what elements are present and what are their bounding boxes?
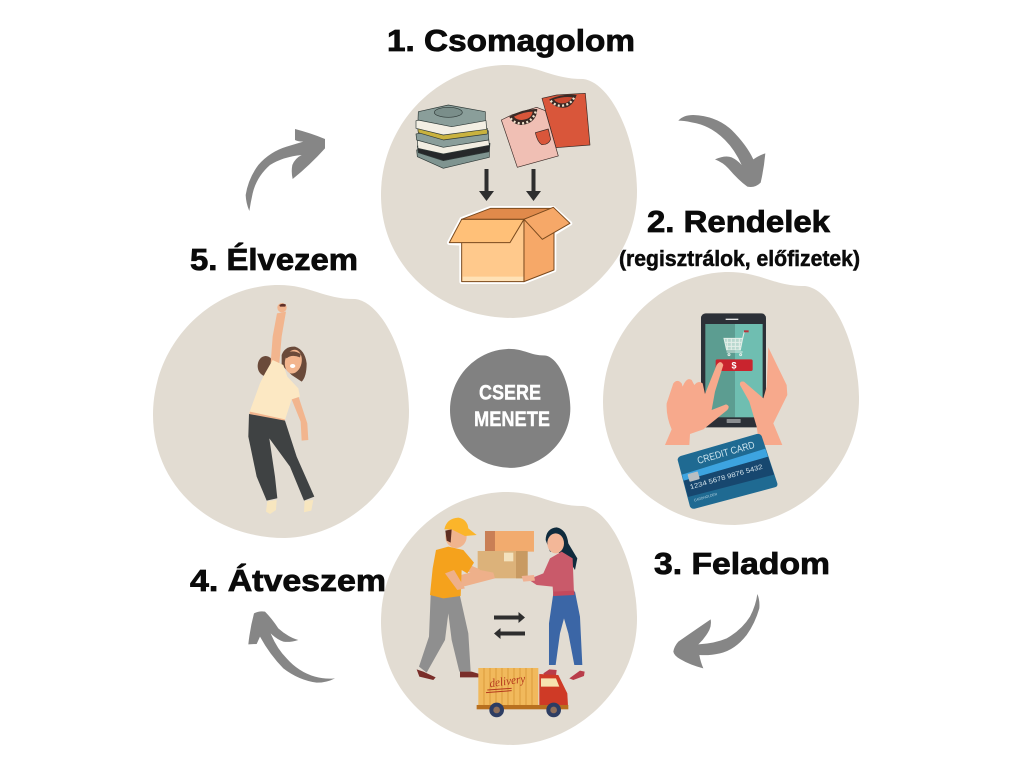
icon: hands holding phone [665,347,787,445]
icon: folded clothes stack [416,105,490,168]
icon: happy woman raising her fist [248,303,314,514]
icon: delivery truck: delivery [488,671,527,690]
arrow: step 3 to 4 [248,611,335,683]
center label: CSERE [479,382,541,404]
arrow: step 1 to 2 [678,115,765,187]
icon: customer woman [522,527,585,680]
icon: stacked parcels [478,531,534,578]
center blob [450,349,570,468]
arrow: step 5 to 1 [246,129,325,211]
blob background 5 [153,285,409,538]
icon: delivery truck [477,668,568,717]
arrow: clothes into box left [479,169,494,201]
icon: open cardboard box [449,207,570,282]
blob background 2 [603,272,859,525]
panel: center badge [450,349,570,468]
blob background 3 [381,492,637,745]
center label [474,382,550,431]
icon: credit card: CREDIT CARD [696,440,756,467]
arrow: step 2 to 3 [673,594,759,668]
panel: step 1 packing [381,65,637,318]
icon: smartphone with shopping cart [701,313,766,427]
panel: step 2 ordering [603,272,859,525]
blob background 1 [381,65,637,318]
heading: step 3: 3. Feladom [654,546,830,581]
center label: MENETE [474,408,550,431]
icon: pink and red shirts [501,93,590,167]
icon: credit card: 1234 5678 9876 5432 [689,464,764,491]
icon: credit card: CARDHOLDER [693,492,718,503]
pay button: $ [731,361,736,371]
icon: shopping cart [724,332,748,356]
arrow: clothes into box right [526,169,541,201]
icon: delivery man [417,518,495,680]
heading: step 5: 5. Élvezem [190,242,358,277]
heading: step 1: 1. Csomagolom [387,23,635,58]
icon: credit card [678,434,777,509]
arrow: exchange right [494,612,525,623]
arrow: exchange left [494,628,525,639]
panel: step 5 enjoying [153,285,409,538]
panel: step 3 and 4 handover [381,492,637,745]
heading: step 2: 2. Rendelek [647,204,831,239]
heading: step 4: 4. Átveszem [190,563,386,598]
text: step 2 subtitle: (regisztrálok, előfizetek) [619,246,860,271]
